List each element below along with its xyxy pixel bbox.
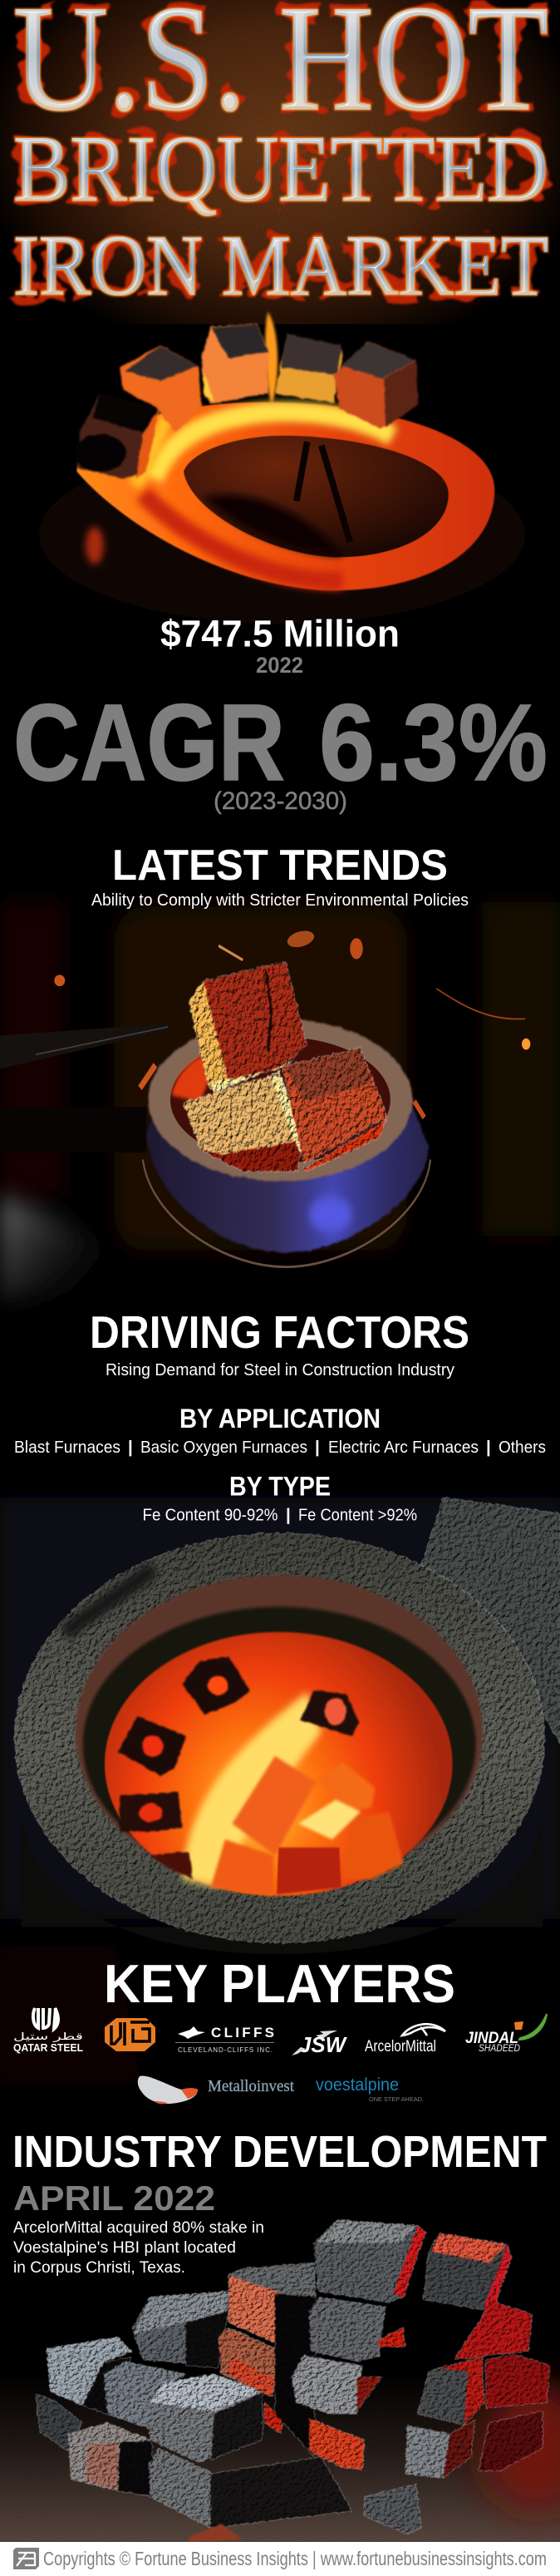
CAGR figure: 6.3% bbox=[319, 681, 548, 803]
tongs bbox=[0, 1024, 168, 1152]
CAGR period: (2023-2030) bbox=[214, 787, 347, 815]
briquette second bbox=[120, 345, 202, 432]
logo: Metalloinvest bbox=[138, 2076, 294, 2104]
burner dish bbox=[143, 1019, 430, 1267]
briquette top bbox=[189, 961, 307, 1093]
title bbox=[13, 0, 548, 313]
list: application segments: Blast Furnaces bbox=[14, 1438, 120, 1457]
burner ring bbox=[76, 402, 494, 590]
furnace rim bbox=[15, 1533, 545, 1954]
logo: Qatar Steel bbox=[13, 2008, 83, 2054]
footer bar bbox=[0, 2542, 560, 2576]
market size year: 2022 bbox=[256, 653, 303, 678]
list: application segments: Basic Oxygen Furnaces bbox=[140, 1438, 307, 1457]
smoky backdrop bbox=[0, 902, 560, 1298]
list: application segments: Others bbox=[499, 1438, 546, 1457]
floor bbox=[0, 2371, 560, 2542]
image: stacked iron briquettes bbox=[0, 2220, 560, 2542]
heading: by application: BY APPLICATION bbox=[179, 1404, 381, 1434]
dish under ring bbox=[39, 446, 525, 624]
list: type segments: Fe Content >92% bbox=[298, 1505, 417, 1525]
list: application segments: Electric Arc Furnaces bbox=[328, 1438, 479, 1457]
market size value: $747.5 Million bbox=[160, 612, 400, 655]
logo: ArcelorMittal: ArcelorMittal bbox=[365, 2038, 436, 2055]
heading: latest trends: LATEST TRENDS bbox=[112, 841, 448, 890]
logo: Qatar Steel: قطر ستيل bbox=[13, 2031, 83, 2043]
list: application segments bbox=[14, 1438, 546, 1457]
text: latest trend detail: Ability to Comply with Stricter Environmental Policies bbox=[91, 891, 469, 910]
faint lower furnace shadow bbox=[0, 1946, 141, 2083]
logo: Jindal Shadeed: SHADEED bbox=[479, 2042, 520, 2054]
panel: rust backdrop behind title bbox=[0, 0, 560, 324]
logo: voestalpine: ONE STEP AHEAD. bbox=[369, 2095, 424, 2103]
briquette right bbox=[334, 342, 418, 429]
logo: Metalloinvest: Metalloinvest bbox=[208, 2077, 294, 2095]
charred briquettes with holes bbox=[118, 1656, 359, 1879]
briquette lower left bbox=[183, 1073, 303, 1172]
icon: Fortune Business Insights logo bbox=[13, 2548, 39, 2569]
hero image: glowing briquettes on burner ring bbox=[39, 312, 525, 624]
image: briquettes in burner with sparks bbox=[0, 902, 560, 1298]
list: type segments: | bbox=[286, 1505, 291, 1525]
list: application segments: | bbox=[128, 1438, 133, 1457]
image: glowing furnace bbox=[0, 1498, 560, 1954]
logo: Cleveland-Cliffs bbox=[175, 2025, 274, 2054]
CAGR figure bbox=[13, 681, 548, 803]
logo: Cleveland-Cliffs: CLEVELAND-CLIFFS INC. bbox=[178, 2046, 273, 2054]
logo: Qatar Steel: QATAR STEEL bbox=[13, 2041, 83, 2054]
dark backdrop bbox=[0, 1498, 560, 1919]
briquette right of flame bbox=[275, 334, 343, 402]
burning coals bbox=[105, 1632, 453, 1896]
date: April 2022: APRIL 2022 bbox=[13, 2179, 215, 2218]
furnace inner wall bbox=[76, 1575, 483, 1889]
logo: Cleveland-Cliffs: CLIFFS bbox=[211, 2025, 274, 2041]
heading: driving factors: DRIVING FACTORS bbox=[90, 1306, 469, 1358]
text: development description bbox=[13, 2219, 264, 2277]
logo: voestalpine bbox=[316, 2075, 424, 2103]
text: driving factor detail: Rising Demand for Steel in Construction Industry bbox=[106, 1360, 455, 1379]
text: development description: in Corpus Christi, Texas. bbox=[13, 2259, 185, 2277]
briquette centre bbox=[202, 323, 268, 404]
heading: by type: BY TYPE bbox=[229, 1472, 331, 1502]
text: development description: Voestalpine's HBI plant located bbox=[13, 2239, 236, 2257]
CAGR figure: CAGR bbox=[13, 681, 285, 803]
logo: Jindal Shadeed: JINDAL bbox=[465, 2030, 518, 2047]
sparks bbox=[54, 929, 530, 1118]
ember debris bbox=[189, 2524, 243, 2542]
logo: ArcelorMittal bbox=[365, 2024, 445, 2055]
list: type segments bbox=[143, 1505, 417, 1525]
text: development description: ArcelorMittal acquired 80% stake in bbox=[13, 2219, 264, 2237]
briquette far left bbox=[74, 393, 159, 479]
briquette stack bbox=[36, 2220, 550, 2534]
logo: orange emblem bbox=[105, 2018, 155, 2051]
list: type segments: Fe Content 90-92% bbox=[143, 1505, 278, 1525]
list: application segments: | bbox=[486, 1438, 491, 1457]
heading: key players: KEY PLAYERS bbox=[104, 1953, 455, 2014]
rock at upper right bbox=[421, 1498, 560, 1744]
logo: JSW: JSW bbox=[299, 2032, 347, 2057]
flame behind cubes bbox=[265, 312, 278, 405]
list: application segments: | bbox=[315, 1438, 320, 1457]
briquette lower right bbox=[282, 1048, 387, 1172]
logo: voestalpine: voestalpine bbox=[316, 2075, 399, 2095]
logo: Jindal Shadeed bbox=[465, 2014, 547, 2054]
